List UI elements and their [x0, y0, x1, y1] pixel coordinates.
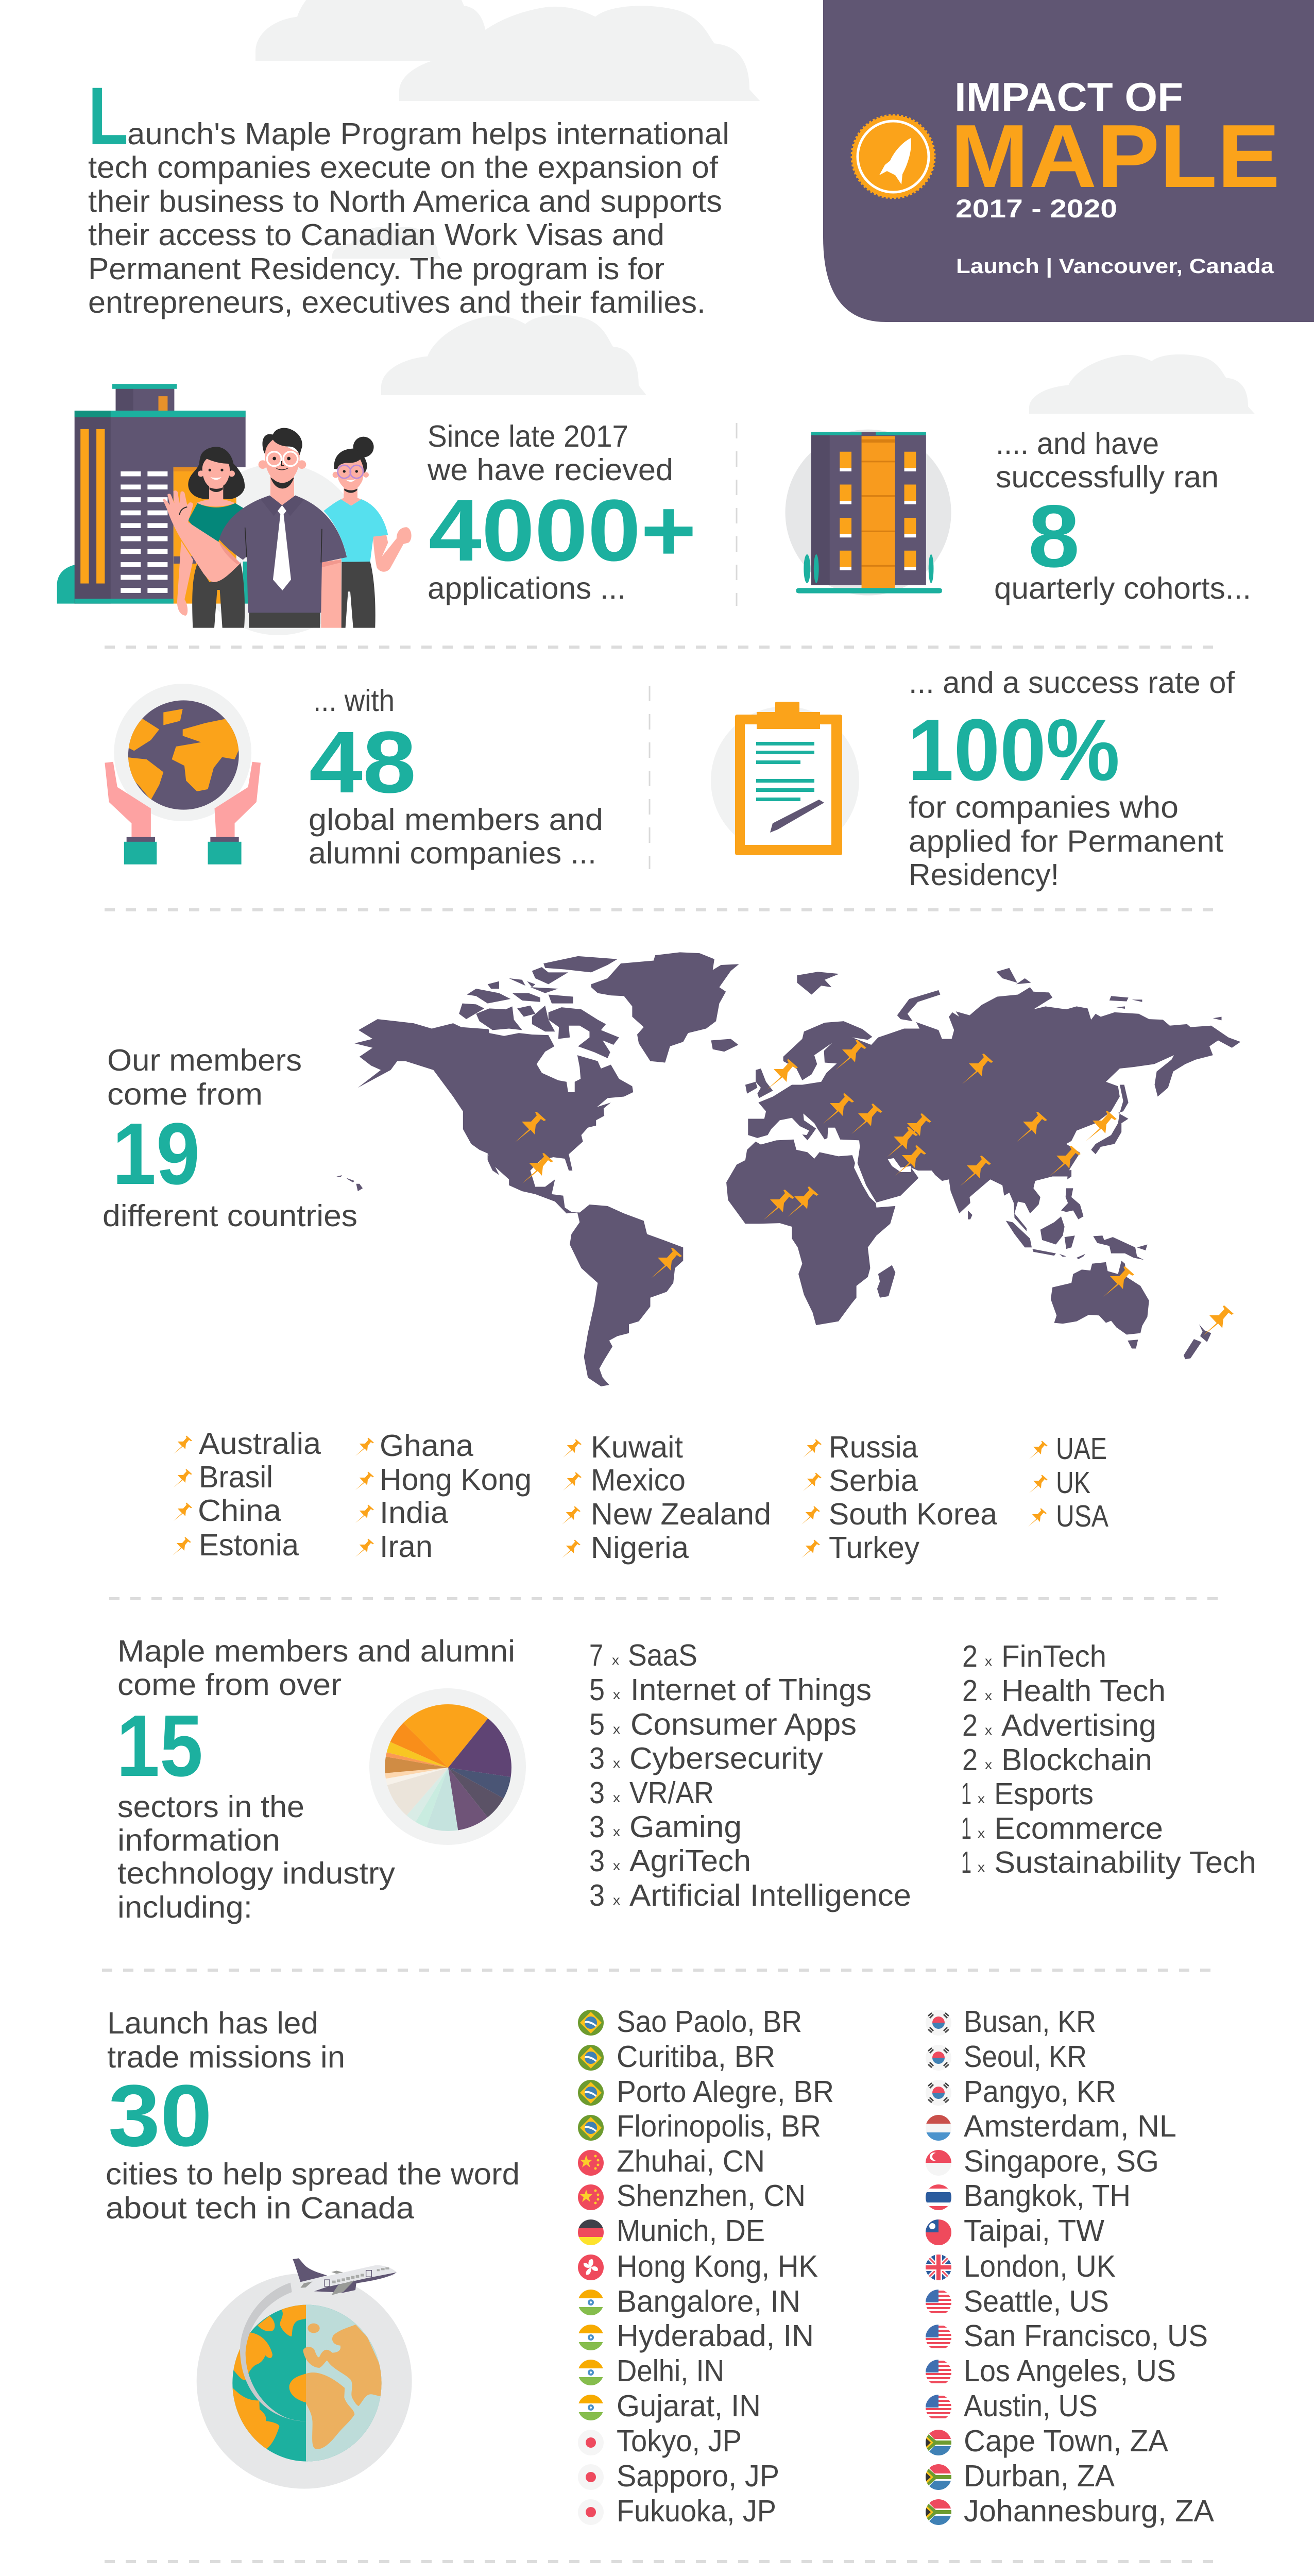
text block: cohorts [994, 427, 1251, 605]
list: countries: China [198, 1494, 281, 1528]
list: sectors column two: Esports [994, 1777, 1094, 1811]
list: countries: Mexico [591, 1463, 686, 1497]
list: cities column two: Busan, KR [964, 2005, 1096, 2039]
list: countries: New Zealand [591, 1497, 771, 1531]
heading: years: 2017 - 2020 [955, 194, 1117, 223]
list: cities column one: Porto Alegre, BR [617, 2075, 834, 2109]
list: cities column two: Seoul, KR [964, 2040, 1087, 2074]
list: cities column two: San Francisco, US [964, 2319, 1208, 2353]
list: cities column one: Sao Paolo, BR [617, 2005, 802, 2039]
list: sectors column two: 2 [962, 1708, 978, 1742]
list: sectors column one: x [613, 1755, 620, 1771]
text block: success rate: for companies who [909, 790, 1179, 824]
list: sectors column two: FinTech [1001, 1639, 1106, 1673]
number: 48: 48 [309, 714, 416, 811]
list: cities column one [578, 2005, 834, 2528]
list: sectors column one: Gaming [629, 1810, 742, 1844]
number: 19: 19 [112, 1105, 200, 1203]
small pin icons [173, 1436, 1048, 1558]
icon: rocket badge [852, 115, 934, 198]
list: sectors column two: x [978, 1791, 985, 1806]
text block: intro: entrepreneurs, executives and their families. [88, 285, 706, 319]
text block: success rate: Residency! [909, 858, 1059, 892]
text block: global members: ... with [313, 684, 395, 718]
list: countries: South Korea [829, 1497, 997, 1531]
text block: countries [103, 1043, 357, 1233]
text block: cohorts: quarterly cohorts... [994, 571, 1251, 605]
list: cities column two: Los Angeles, US [964, 2354, 1176, 2388]
list: cities column one: Sapporo, JP [617, 2459, 779, 2493]
icon: airplane [293, 2258, 397, 2295]
list: sectors column two: 1 [961, 1811, 971, 1845]
list: cities column two: London, UK [964, 2249, 1116, 2283]
list: sectors column two: 1 [961, 1845, 971, 1879]
text block: cohorts: successfully ran [996, 460, 1219, 494]
list: cities column two [926, 2005, 1215, 2528]
person: woman in teal [177, 447, 245, 628]
list: sectors column two: x [978, 1825, 985, 1841]
text block: trade missions: Launch has led [107, 2006, 318, 2040]
heading: maple: MAPLE [950, 106, 1280, 206]
list: sectors column one: 5 [589, 1673, 605, 1707]
list: sectors column one: 3 [589, 1776, 605, 1810]
list: cities column two: Bangkok, TH [964, 2179, 1131, 2213]
list: cities column one: Tokyo, JP [617, 2424, 742, 2458]
list: sectors column one: 3 [589, 1741, 605, 1775]
list: sectors column two: Ecommerce [994, 1811, 1163, 1845]
list: sectors column one: 3 [589, 1810, 605, 1844]
list: sectors column one: x [613, 1721, 620, 1737]
text block: sectors: including: [117, 1890, 252, 1924]
list: countries: UAE [1056, 1432, 1107, 1466]
list: sectors column two: Advertising [1001, 1708, 1156, 1742]
list: cities column two: Seattle, US [964, 2284, 1109, 2318]
text block: intro: tech companies execute on the expansion of [88, 150, 719, 184]
text block: intro [88, 70, 729, 319]
list: cities column one: Delhi, IN [617, 2354, 724, 2388]
map pins [515, 1040, 1234, 1336]
list: cities column two: Johannesburg, ZA [964, 2494, 1215, 2528]
text block: intro: Permanent Residency. The program is for [88, 252, 664, 286]
list: sectors column two [961, 1639, 1256, 1879]
text block: countries: different countries [103, 1199, 357, 1233]
illustration: three people [163, 428, 412, 628]
list: sectors column two: x [985, 1722, 992, 1738]
text block: sectors: Maple members and alumni [117, 1634, 515, 1668]
list: countries: Brasil [199, 1460, 273, 1494]
text block: trade missions: about tech in Canada [106, 2191, 414, 2225]
text block: applications [427, 419, 696, 605]
icon: office building [57, 384, 364, 635]
text block: sectors: technology industry [117, 1856, 396, 1890]
text block: countries: come from [107, 1077, 263, 1111]
text block: intro: L [88, 70, 128, 162]
list: sectors column two: x [985, 1653, 992, 1669]
list: countries [173, 1427, 1109, 1565]
location line: Launch | Vancouver, Canada [956, 255, 1274, 278]
list: sectors column two: 2 [962, 1743, 978, 1777]
list: sectors column one: Internet of Things [630, 1673, 872, 1707]
list: cities column one: Fukuoka, JP [617, 2494, 776, 2528]
list: cities column two: Taipai, TW [964, 2214, 1104, 2248]
text block: sectors: information [117, 1823, 280, 1857]
list: cities column two: Pangyo, KR [964, 2075, 1116, 2109]
list: cities column two: Austin, US [964, 2389, 1098, 2423]
icon: globe held by hands [105, 684, 261, 865]
text block: sectors: come from over [117, 1668, 342, 1702]
list: sectors column two: Health Tech [1001, 1674, 1166, 1708]
list: sectors column one: 7 [589, 1638, 603, 1672]
list: sectors column one: x [613, 1824, 620, 1839]
list: sectors column two: Blockchain [1001, 1743, 1152, 1777]
number: 4000+: 4000+ [429, 482, 696, 580]
list: sectors column two: 1 [961, 1777, 971, 1811]
text block: success rate [908, 666, 1235, 892]
text block: success rate: ... and a success rate of [909, 666, 1235, 700]
map: americas and greenland [336, 952, 739, 1386]
number: 15: 15 [116, 1697, 203, 1795]
list: sectors column one [589, 1638, 911, 1912]
text block: trade missions [106, 2006, 520, 2225]
text block: intro: aunch's Maple Program helps international [127, 117, 729, 151]
list: cities column one: Curitiba, BR [617, 2040, 775, 2074]
list: sectors column two: 2 [962, 1674, 978, 1708]
list: cities column two: Amsterdam, NL [964, 2109, 1176, 2143]
list: cities column one: Shenzhen, CN [617, 2179, 806, 2213]
list: sectors column one: Cybersecurity [629, 1741, 824, 1775]
text block: sectors: sectors in the [117, 1790, 304, 1824]
icon: clipboard [711, 702, 859, 855]
list: cities column one: Zhuhai, CN [617, 2144, 765, 2178]
list: sectors column one: 3 [589, 1878, 605, 1912]
list: sectors column two: x [985, 1757, 992, 1772]
list: sectors column one: x [613, 1687, 620, 1702]
number: 30: 30 [108, 2067, 212, 2165]
text block: countries: Our members [107, 1043, 302, 1077]
list: cities column one: Gujarat, IN [617, 2389, 761, 2423]
list: cities column one: Hyderabad, IN [617, 2319, 814, 2353]
text block: applications: Since late 2017 [428, 419, 628, 453]
list: sectors column two: x [978, 1859, 985, 1875]
map: africa eurasia australia [726, 968, 1240, 1359]
list: countries: Serbia [829, 1464, 918, 1498]
list: sectors column one: x [613, 1790, 620, 1805]
list: sectors column two: Sustainability Tech [994, 1845, 1256, 1879]
text block: success rate: applied for Permanent [909, 824, 1223, 858]
text block: global members [309, 684, 603, 870]
chart: sector pie [369, 1688, 526, 1845]
heading: impact of: IMPACT OF [954, 74, 1183, 120]
list: sectors column one: Consumer Apps [630, 1707, 857, 1741]
list: cities column one: Munich, DE [617, 2214, 765, 2248]
list: cities column two: Durban, ZA [964, 2459, 1115, 2493]
number: 8: 8 [1028, 487, 1080, 586]
list: countries: Nigeria [591, 1531, 689, 1565]
icon: globe with airplane [197, 2258, 412, 2489]
list: cities column two: Cape Town, ZA [964, 2424, 1169, 2458]
list: sectors column one: AgriTech [629, 1844, 751, 1878]
icon: apartment building [785, 430, 951, 596]
text block: global members: alumni companies ... [309, 836, 596, 870]
number: 100%: 100% [908, 701, 1120, 799]
text block: applications: applications ... [428, 571, 626, 605]
list: cities column two: Singapore, SG [964, 2144, 1159, 2178]
list: countries: USA [1056, 1499, 1109, 1533]
list: countries: UK [1056, 1466, 1090, 1500]
list: sectors column one: 3 [589, 1844, 605, 1878]
list: cities column one: Florinopolis, BR [617, 2109, 821, 2143]
text block: global members: global members and [309, 803, 603, 837]
list: countries: Iran [380, 1530, 433, 1564]
list: cities column one: Hong Kong, HK [617, 2249, 818, 2283]
list: cities column one: Bangalore, IN [617, 2284, 800, 2318]
chart: world map with pins [336, 952, 1240, 1386]
list: countries: Ghana [380, 1429, 473, 1463]
list: countries: India [380, 1496, 448, 1530]
list: sectors column one: x [613, 1892, 620, 1908]
list: countries: Russia [829, 1430, 918, 1464]
text block: sectors [116, 1634, 515, 1924]
text block: intro: their business to North America and supports [88, 184, 722, 218]
list: sectors column one: Artificial Intelligence [629, 1878, 911, 1912]
list: countries: Hong Kong [380, 1463, 532, 1497]
list: countries: Australia [199, 1427, 321, 1461]
list: sectors column one: SaaS [628, 1638, 697, 1672]
panel: title header [823, 0, 1314, 322]
text block: trade missions: cities to help spread the word [106, 2157, 520, 2191]
text block: trade missions: trade missions in [107, 2040, 345, 2074]
list: sectors column two: x [985, 1688, 992, 1703]
background clouds [255, 0, 1255, 414]
list: sectors column one: x [613, 1858, 620, 1873]
text block: intro: their access to Canadian Work Visas and [88, 218, 664, 252]
list: countries: Turkey [829, 1531, 919, 1565]
list: sectors column one: x [612, 1652, 619, 1668]
person: woman in blue [323, 437, 412, 628]
list: sectors column one: 5 [589, 1707, 605, 1741]
list: countries: Kuwait [591, 1430, 683, 1464]
text block: cohorts: .... and have [996, 427, 1159, 461]
person: man with tie [163, 428, 347, 628]
list: sectors column one: VR/AR [629, 1776, 714, 1810]
text block: applications: we have recieved [427, 453, 673, 487]
list: countries: Estonia [199, 1528, 299, 1562]
list: sectors column two: 2 [962, 1639, 978, 1673]
